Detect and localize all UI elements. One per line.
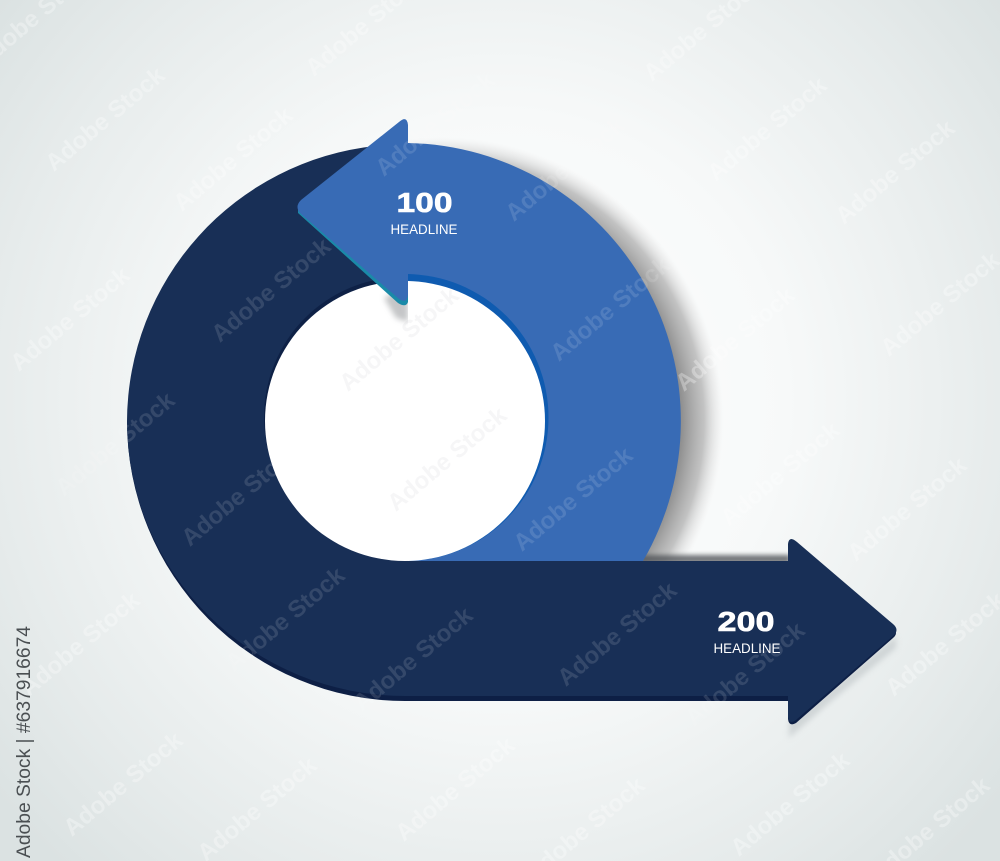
stock watermarks over the background: Adobe Stock bbox=[725, 746, 856, 861]
stock watermarks over the shapes: Adobe Stock bbox=[370, 66, 501, 182]
light blue arc arrow pointing left bbox=[262, 119, 681, 561]
stock watermarks over the white circle: Adobe Stock bbox=[334, 281, 465, 397]
stock watermarks over the shapes: Adobe Stock bbox=[680, 616, 811, 732]
stock watermarks over the background: Adobe Stock bbox=[842, 451, 973, 567]
vertical stock id text: Adobe Stock | #637916674 bbox=[14, 626, 35, 858]
headline text: HEADLINE bbox=[390, 221, 458, 237]
stock watermarks over the background: Adobe Stock bbox=[168, 101, 299, 217]
headline text: HEADLINE bbox=[714, 640, 780, 656]
shadow of the light arrow head on the white circle bbox=[384, 284, 408, 322]
centre white circle bbox=[265, 281, 545, 561]
stock watermarks over the background: Adobe Stock bbox=[5, 261, 136, 377]
stock watermarks over the background: Adobe Stock bbox=[702, 71, 833, 187]
darker inner edge of the arc bbox=[408, 274, 548, 560]
stock watermarks over the shapes: Adobe Stock bbox=[50, 386, 181, 502]
white disc over the arc inner edge bbox=[408, 281, 545, 561]
stock watermarks over the shapes: Adobe Stock bbox=[545, 251, 676, 367]
drop shadow behind the light arc bbox=[407, 142, 718, 561]
arrow head lower teal edge bbox=[298, 200, 408, 305]
stock watermarks over the shapes: Adobe Stock bbox=[206, 232, 337, 348]
drop shadow under the arrow head bbox=[789, 636, 896, 738]
stock watermarks over the white circle bbox=[334, 281, 513, 517]
stock watermarks over the shapes bbox=[50, 66, 811, 732]
stock watermarks over the background: Adobe Stock bbox=[40, 61, 171, 177]
stock watermarks over the background: Adobe Stock bbox=[670, 281, 801, 397]
value 200: 200 bbox=[718, 606, 774, 637]
stock watermarks over the shapes: Adobe Stock bbox=[348, 601, 479, 717]
label: 200 headline bbox=[714, 606, 780, 656]
stock watermarks over the white circle: Adobe Stock bbox=[382, 401, 513, 517]
stock watermarks over the shapes: Adobe Stock bbox=[500, 111, 631, 227]
stock watermarks over the shapes: Adobe Stock bbox=[220, 561, 351, 677]
dark arrow body bbox=[127, 146, 896, 722]
stock watermarks over the shapes: Adobe Stock bbox=[508, 441, 639, 557]
light arc body and head bbox=[298, 119, 681, 561]
drop shadow above the arrow shaft bbox=[640, 555, 790, 563]
stock watermarks over the background: Adobe Stock bbox=[15, 586, 146, 702]
stock watermarks over the background: Adobe Stock bbox=[715, 416, 846, 532]
value 100: 100 bbox=[396, 187, 452, 218]
dark arrow lower edge bbox=[127, 421, 896, 724]
label: 100 headline bbox=[390, 187, 458, 237]
dark inner edge of the loop bbox=[264, 277, 544, 557]
stock watermarks over the background: Adobe Stock bbox=[830, 114, 961, 230]
dark blue arrow: large loop ending in a right-pointing arrow bbox=[127, 146, 896, 724]
stock watermarks over the background: Adobe Stock bbox=[58, 726, 189, 842]
stock watermarks over the shapes: Adobe Stock bbox=[552, 576, 683, 692]
stock watermarks over the background: Adobe Stock bbox=[390, 731, 521, 847]
stock watermarks over the shapes: Adobe Stock bbox=[176, 436, 307, 552]
